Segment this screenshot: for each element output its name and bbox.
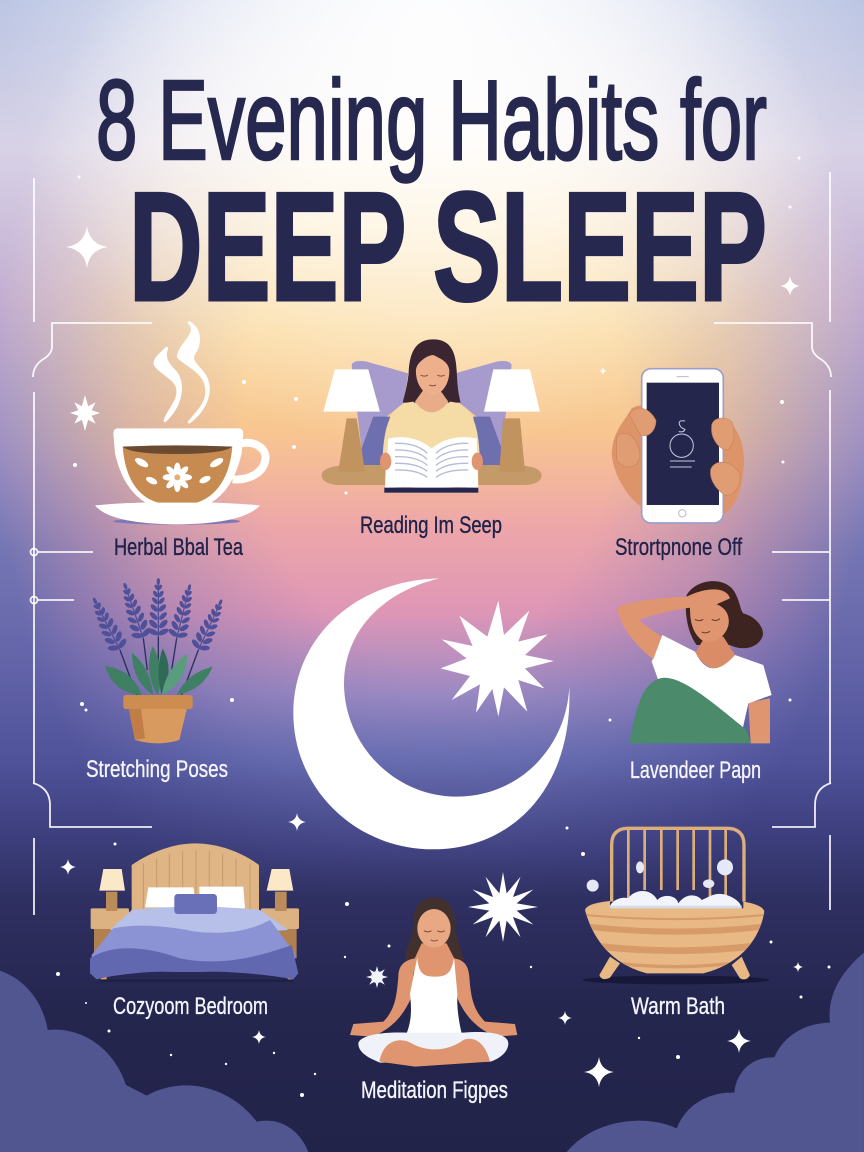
icon: small fuzzy star	[366, 966, 388, 988]
icon: woman reading	[322, 339, 542, 493]
decorative frame lines	[30, 172, 831, 915]
icon: smartphone off in hands	[612, 369, 744, 523]
icon: meditation figure	[350, 897, 517, 1067]
icon: bath tub	[583, 828, 769, 984]
cloud right	[567, 953, 864, 1152]
cloud left	[0, 971, 308, 1152]
icon: star near meditation	[468, 872, 538, 942]
sparkles top	[66, 156, 800, 494]
labels	[86, 512, 761, 1104]
icon: lavender plant	[83, 578, 232, 743]
icon: woman stretching	[617, 581, 772, 743]
title	[96, 57, 767, 333]
icon: bed	[90, 843, 299, 982]
label: phone: Strortpnone Off	[615, 534, 742, 561]
icon: large star	[441, 601, 554, 717]
label: bath: Warm Bath	[631, 993, 725, 1020]
label: lavender: Lavendeer Papn	[630, 757, 761, 784]
label: reading: Reading Im Seep	[360, 512, 502, 539]
label: stretching: Stretching Poses	[86, 756, 228, 783]
label: bedroom: Cozyoom Bedroom	[113, 993, 268, 1020]
sparkles lower	[56, 698, 830, 1097]
label: meditation: Meditation Figpes	[361, 1077, 508, 1104]
label: tea: Herbal Bbal Tea	[114, 534, 243, 561]
central crescent moon	[293, 578, 569, 849]
icon: herbal tea cup	[95, 323, 266, 525]
